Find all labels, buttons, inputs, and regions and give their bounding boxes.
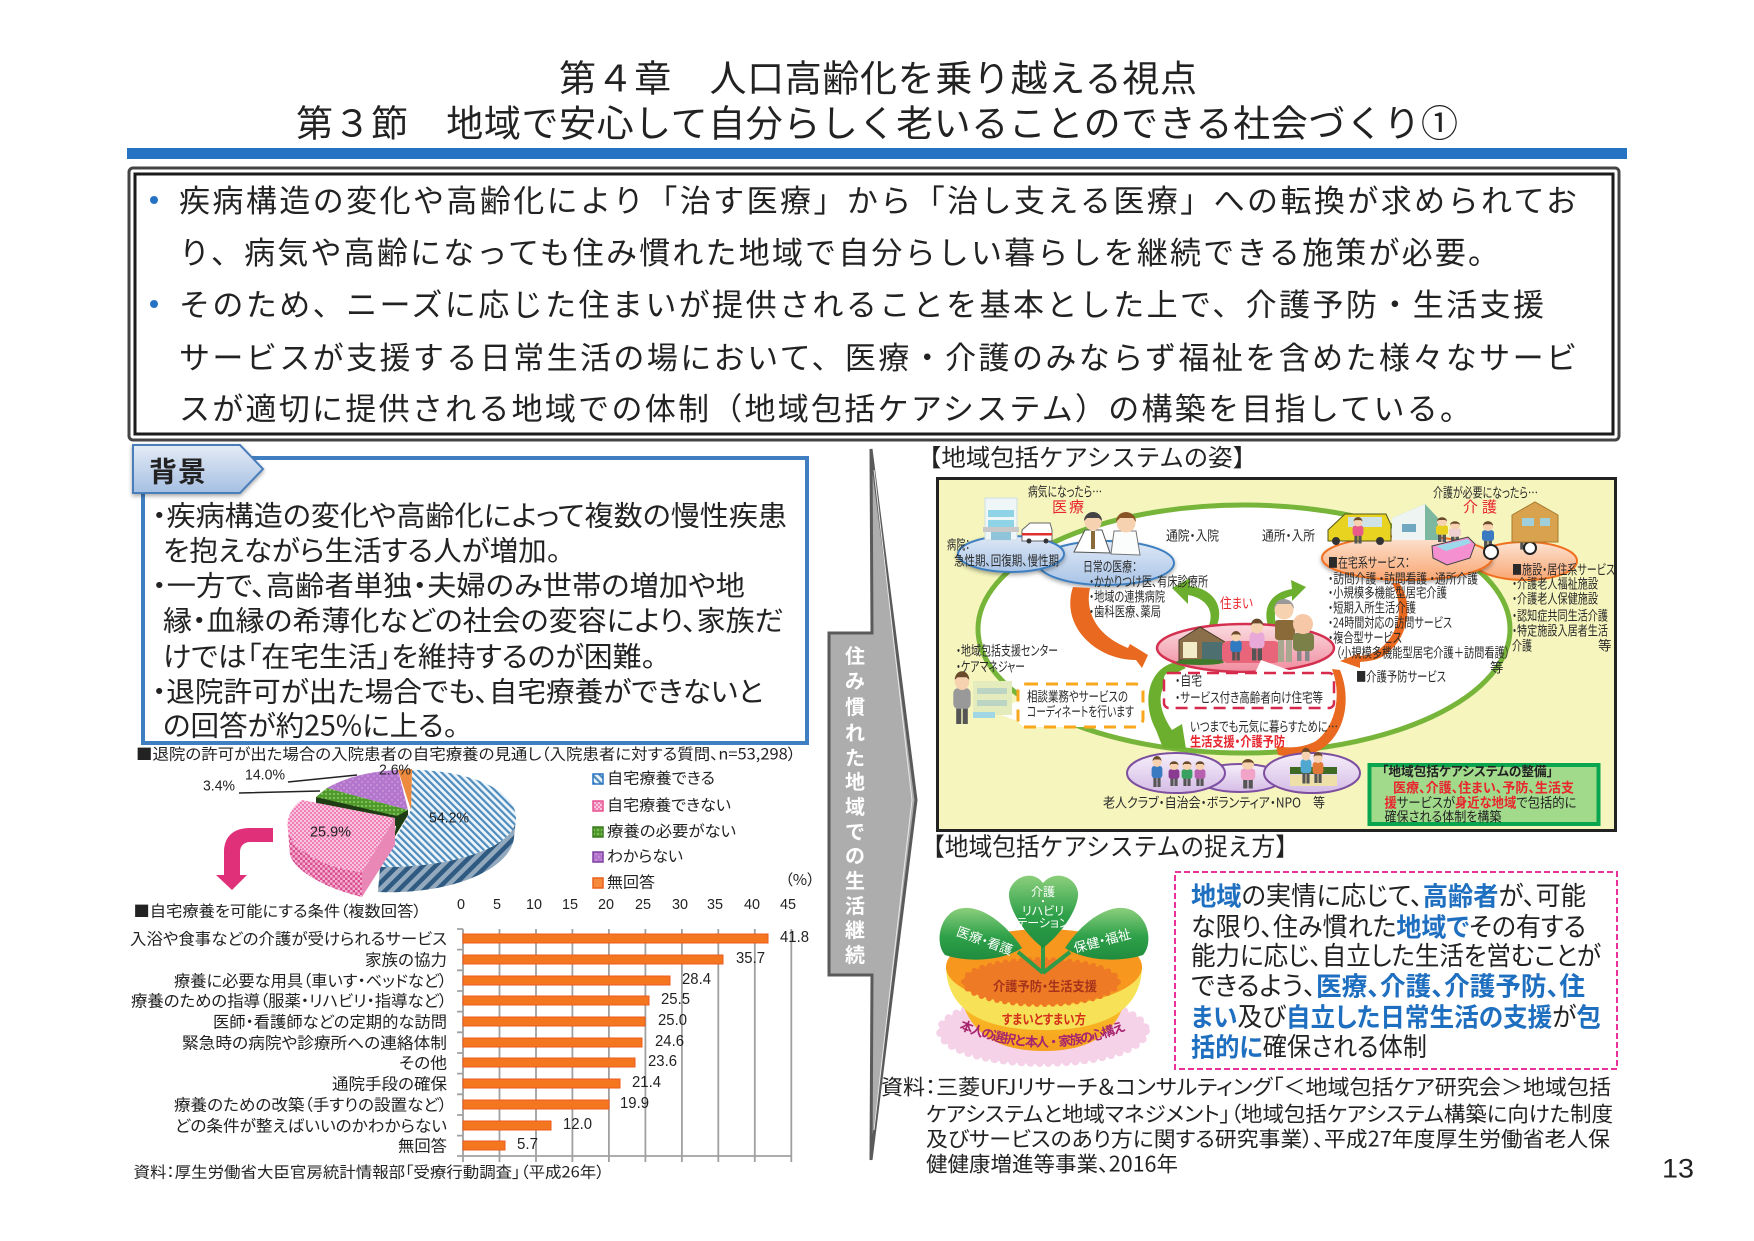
- bullet 2: [150, 300, 158, 308]
- diagram labels: facility: 等: [1598, 635, 1612, 655]
- callout: definition: [1175, 872, 1617, 1069]
- community ellipses: [1127, 753, 1360, 793]
- axis numbers: 15: [562, 896, 578, 913]
- axis numbers: 40: [744, 896, 760, 913]
- arrow label: み: [845, 665, 865, 694]
- orange soil: [946, 929, 1142, 1005]
- bar categories: 通院手段の確保: [332, 1071, 447, 1095]
- diagram labels: prevention: [1103, 716, 1338, 812]
- source: right: 及びサービスのあり方に関する研究事業）、平成27年度厚生労働省老人保: [926, 1124, 1610, 1154]
- diagram labels: support centre: ・地域包括支援センター: [956, 640, 1058, 660]
- bar values: 24.6: [655, 1033, 684, 1050]
- callout: definition: 括的に確保される体制: [1191, 1027, 1427, 1064]
- bar values: 28.4: [682, 971, 711, 988]
- arrow label: 生: [845, 865, 865, 894]
- diagram labels: care: ・短期入所生活介護: [1328, 597, 1416, 617]
- callout: system definition: 医療、介護、住まい、予防、生活支: [1393, 777, 1574, 797]
- diagram labels: care: ・訪問介護 ・訪問看護 ・通所介護: [1328, 568, 1478, 588]
- arrow label: [845, 640, 865, 968]
- diagram labels: care: ・小規模多機能型居宅介護: [1328, 582, 1447, 602]
- background text: 縁・血縁の希薄化などの社会の変容により、家族だ: [163, 600, 784, 640]
- bowl labels: [960, 976, 1126, 1048]
- icon: doctors: [1074, 512, 1140, 555]
- yellow rim: [946, 965, 1142, 1030]
- diagram labels: care: 介 護: [1463, 496, 1497, 517]
- arrow: home to community: [1148, 662, 1186, 749]
- axis numbers: 35: [707, 896, 723, 913]
- background text: けでは「在宅生活」を維持するのが困難。: [163, 636, 656, 676]
- bar categories: 療養に必要な用具（車いす・ベッドなど）: [174, 968, 447, 992]
- panel: summary box: 疾病構造の変化や高齢化により「治す医療」から「治し支える医療」への転換が求められてお: [179, 176, 1577, 221]
- bar chart heading: ■自宅療養を可能にする条件（複数回答）: [134, 900, 422, 922]
- arrow label: 住: [845, 640, 865, 669]
- page number: 13: [1662, 1154, 1694, 1184]
- source: right: ケアシステムと地域マネジメント」（地域包括ケアシステム構築に向けた制度: [926, 1099, 1613, 1129]
- title: [296, 49, 1458, 148]
- diagram labels: support centre: ・ケアマネジャー: [956, 656, 1025, 676]
- background text: [152, 495, 787, 745]
- bar values: 5.7: [517, 1136, 538, 1153]
- tag: 背景: 背景: [149, 451, 206, 491]
- bullet 1: [150, 196, 158, 204]
- callout: definition: な限り、住み慣れた地域でその有する: [1191, 907, 1586, 944]
- leaf: care: 介護: [1031, 883, 1055, 900]
- source: left: 資料：厚生労働省大臣官房統計情報部「受療行動調査」（平成26年）: [134, 1161, 604, 1183]
- bowl labels: 介護予防・生活支援: [993, 976, 1097, 995]
- arrow label: 地: [845, 766, 865, 795]
- source: right: [881, 1072, 1613, 1179]
- pie labels: [203, 763, 469, 841]
- background text: を抱えながら生活する人が増加。: [163, 530, 561, 570]
- diagram labels: prevention: 老人クラブ・自治会・ボランティア・NPO 等: [1103, 792, 1325, 812]
- callout: system definition: 「地域包括ケアシステムの整備」: [1382, 761, 1553, 780]
- bar categories: 家族の協力: [365, 947, 447, 971]
- plate: [939, 998, 1147, 1064]
- panel: care system diagram: [938, 478, 1616, 830]
- diagram labels: care: 介護が必要になったら…: [1433, 482, 1538, 502]
- diagram labels: support centre: [956, 640, 1134, 721]
- pie labels: 54.2%: [429, 811, 469, 827]
- panel: summary box: [129, 168, 1619, 440]
- diagram labels: medical: 医 療: [1052, 496, 1084, 517]
- arrow label: 慣: [845, 691, 865, 720]
- diagram labels: facility: ・認知症共同生活介護: [1512, 605, 1608, 625]
- icon: wheelchair users: [1482, 521, 1536, 559]
- slice: 25.9%: [288, 800, 395, 897]
- icon: bathing: [1432, 517, 1475, 565]
- arrow label: 活: [845, 890, 865, 919]
- bar values: 19.9: [620, 1095, 649, 1112]
- callout: coordinator: [993, 684, 1143, 727]
- bar categories: 入浴や食事などの介護が受けられるサービス: [130, 926, 447, 950]
- bar chart: [130, 896, 809, 1162]
- pie labels: 2.6%: [379, 763, 411, 779]
- pie chart heading: ■退院の許可が出た場合の入院患者の自宅療養の見通し（入院患者に対する質問、n=53,298）: [136, 743, 796, 765]
- slice: 3.4%: [316, 788, 408, 838]
- source: right: 資料：三菱UFJリサーチ＆コンサルティング「＜地域包括ケア研究会＞地域包括: [881, 1072, 1611, 1102]
- icon: care vehicle: [1328, 514, 1391, 545]
- diagram labels: care: 等: [1490, 657, 1504, 677]
- axis numbers: 20: [598, 896, 614, 913]
- diagram labels: housing: ・サービス付き高齢者向け住宅等: [1175, 687, 1323, 707]
- bar values: 12.0: [563, 1116, 592, 1133]
- diagram labels: housing: ・自宅: [1175, 670, 1202, 690]
- pie legend: 療養の必要がない: [607, 820, 736, 842]
- pie legend: 無回答: [607, 871, 656, 893]
- diagram labels: medical: [947, 481, 1315, 621]
- diagram labels: medical: 病気になったら…: [1028, 481, 1102, 501]
- diagram labels: medical: ・かかりつけ医、有床診療所: [1089, 571, 1208, 591]
- callout: definition: まい及び自立した日常生活の支援が包: [1191, 997, 1601, 1034]
- diagram labels: care: ■介護予防サービス: [1356, 666, 1446, 686]
- icon: house: [1176, 627, 1225, 665]
- callout: system definition: [1370, 761, 1598, 826]
- pie chart: [203, 763, 516, 897]
- diagram labels: medical: 通所・入所: [1262, 525, 1315, 545]
- pie labels: 14.0%: [245, 768, 285, 784]
- pie legend: [593, 767, 736, 893]
- title: 第４章 人口高齢化を乗り越える視点: [559, 49, 1197, 103]
- diagram labels: facility: ・介護老人福祉施設: [1512, 573, 1598, 593]
- slice: 2.6%: [398, 769, 412, 810]
- leaf: welfare: 保健・福祉: [1071, 923, 1133, 957]
- callout: housing: [1164, 660, 1334, 708]
- icon: family on sofa: [1222, 619, 1280, 663]
- medical ellipses: [958, 536, 1174, 585]
- diagram labels: prevention: いつまでも元気に暮らすために…: [1190, 716, 1338, 736]
- bar categories: どの条件が整えばいいのかわからない: [175, 1113, 447, 1137]
- bar categories: [130, 926, 447, 1157]
- bar values: 41.8: [780, 929, 809, 946]
- bar values: 23.6: [648, 1053, 677, 1070]
- diagram labels: prevention: 生活支援・介護予防: [1190, 731, 1285, 751]
- diagram labels: care: （小規模多機能型居宅介護＋訪問看護）: [1336, 642, 1510, 662]
- diagram labels: medical: 急性期、回復期、慢性期: [954, 550, 1059, 570]
- bar values: 35.7: [736, 950, 765, 967]
- leaf: care: リハビリ: [1022, 902, 1064, 919]
- tag: 背景: [133, 445, 263, 493]
- ring: [978, 505, 1510, 753]
- title: 第３節 地域で安心して自分らしく老いることのできる社会づくり①: [296, 94, 1458, 148]
- inner soil: [963, 960, 1119, 1004]
- diagram labels: medical: 通院・入院: [1166, 525, 1219, 545]
- diagram labels: medical: ・地域の連携病院: [1089, 586, 1165, 606]
- icon: elderly couple: [1274, 599, 1314, 662]
- diagram labels: housing: [1175, 594, 1323, 707]
- pie legend: わからない: [607, 845, 683, 867]
- background text: の回答が約25%に上る。: [163, 705, 458, 745]
- icon: walking pair: [1290, 748, 1337, 786]
- bar categories: 療養のための指導（服薬・リハビリ・指導など）: [131, 988, 447, 1012]
- icon: ambulance: [1022, 523, 1052, 544]
- axis numbers: 45: [780, 896, 796, 913]
- percent unit: （%）: [785, 869, 815, 890]
- bowl labels: すまいとすまい方: [1002, 1009, 1086, 1028]
- leaf: care: テーション: [1016, 914, 1070, 931]
- diagram labels: care: [1328, 482, 1538, 686]
- arrow label: 域: [845, 791, 865, 820]
- callout: system definition: 確保される体制を構築: [1384, 806, 1502, 826]
- arrow: home to care: [1266, 580, 1306, 626]
- heading: care system: 【地域包括ケアシステムの姿】: [917, 438, 1257, 473]
- diagram labels: medical: 病院：: [947, 534, 970, 554]
- axis numbers: 5: [493, 896, 501, 913]
- bar values: [517, 929, 809, 1153]
- bar values: 25.5: [661, 991, 690, 1008]
- diagram labels: support centre: 相談業務やサービスの: [1027, 686, 1128, 706]
- diagram labels: facility: 介護: [1512, 635, 1532, 655]
- panel: summary box: り、病気や高齢になっても住み慣れた地域で自分らしい暮らしを継続できる施策が必要。: [179, 228, 1499, 273]
- icon: care facility: [1392, 504, 1438, 540]
- background text: ・退院許可が出た場合でも、自宅療養ができないと: [152, 671, 763, 711]
- bar categories: 医師・看護師などの定期的な訪問: [213, 1009, 447, 1033]
- background text: ・疾病構造の変化や高齢化によって複数の慢性疾患: [152, 495, 787, 535]
- axis numbers: 30: [672, 896, 688, 913]
- pie legend: 自宅療養できる: [607, 767, 715, 789]
- arrow label: た: [845, 742, 865, 771]
- icon: elderly group: [1152, 756, 1205, 787]
- bar categories: 療養のための改築（手すりの設置など）: [174, 1092, 447, 1116]
- arrow: medical to home: [1070, 587, 1148, 668]
- arrow label: れ: [845, 717, 865, 746]
- bar values: 25.0: [658, 1012, 687, 1029]
- diagram labels: support centre: コーディネートを行います: [1027, 701, 1134, 721]
- illustration: plant and bowl: [936, 876, 1150, 1067]
- panel: summary box: スが適切に提供される地域での体制（地域包括ケアシステム）の構築を目指している。: [179, 384, 1471, 429]
- leaf: medical: [940, 908, 1022, 960]
- icon: hospital: [983, 498, 1019, 540]
- callout: definition: できるよう、医療、介護、介護予防、住: [1191, 966, 1585, 1003]
- pie labels: 25.9%: [310, 825, 351, 841]
- icon: support centre building: [973, 681, 1012, 718]
- diagram labels: medical: ・歯科医療、薬局: [1089, 601, 1161, 621]
- panel: summary box: そのため、ニーズに応じた住まいが提供されることを基本とした上で、介護予防・生活支援: [179, 280, 1544, 325]
- leaf: care: [1009, 876, 1078, 948]
- diagram labels: housing: 住まい: [1220, 594, 1253, 614]
- axis numbers: 25: [635, 896, 651, 913]
- pie labels: 3.4%: [203, 779, 235, 795]
- diagram labels: care: ・複合型サービス: [1328, 627, 1402, 647]
- leaf: welfare: [1065, 908, 1148, 960]
- bar categories: 無回答: [398, 1133, 447, 1157]
- diagram labels: facility: [1512, 559, 1615, 655]
- stems: [1018, 940, 1070, 973]
- slice: 14.0%: [327, 770, 408, 810]
- arrow label: の: [845, 840, 865, 869]
- icon: pink arrow: [216, 828, 273, 890]
- icon: care manager: [953, 671, 971, 724]
- care ellipses: [1322, 536, 1577, 580]
- background text: ・一方で、高齢者単独・夫婦のみ世帯の増加や地: [152, 565, 745, 605]
- arrow: community to home: [1276, 669, 1346, 756]
- slice: 54.2%: [378, 770, 516, 892]
- axis numbers: 10: [526, 896, 542, 913]
- diagram labels: care: ■在宅系サービス：: [1328, 552, 1410, 572]
- leaf: medical: 医療・看護: [954, 921, 1016, 959]
- pie legend: 自宅療養できない: [607, 794, 731, 816]
- source: right: 健健康増進等事業、2016年: [926, 1149, 1178, 1179]
- diagram labels: care: ・24時間対応の訪問サービス: [1328, 612, 1452, 632]
- bar categories: その他: [399, 1050, 447, 1074]
- arrow label: 続: [845, 939, 865, 968]
- callout: system definition: 援サービスが身近な地域で包括的に: [1384, 792, 1576, 812]
- diagram labels: facility: ・介護老人保健施設: [1512, 588, 1598, 608]
- title underline bar: [127, 148, 1627, 159]
- leaf: care: ・: [1038, 893, 1048, 908]
- bowl labels: 本人の選択と本人・家族の心構え: [960, 1020, 1126, 1048]
- panel: background: [133, 445, 807, 745]
- bowl: [957, 968, 1130, 1051]
- bar categories: 緊急時の病院や診療所への連絡体制: [182, 1030, 447, 1054]
- bars: [463, 934, 768, 1150]
- arrow: center grey: [829, 449, 916, 1160]
- diagram labels: facility: ・特定施設入居者生活: [1512, 620, 1608, 640]
- arrow label: で: [845, 816, 865, 845]
- callout: definition: 能力に応じ、自立した生活を営むことが: [1191, 936, 1601, 973]
- arrow: care to home: [1340, 583, 1407, 668]
- arrow label: 継: [845, 914, 865, 943]
- diagram labels: medical: 日常の医療：: [1083, 556, 1137, 576]
- bar values: 21.4: [632, 1074, 661, 1091]
- axis numbers: [457, 896, 796, 913]
- diagram labels: facility: ■施設・居住系サービス: [1512, 559, 1615, 579]
- heading: how to view: 【地域包括ケアシステムの捉え方】: [921, 828, 1299, 864]
- home ellipse: [1157, 624, 1334, 672]
- arrow: home to medical: [1172, 578, 1219, 628]
- icon: nursing house: [1512, 502, 1558, 542]
- panel: summary box: サービスが支援する日常生活の場において、医療・介護のみならず福祉を含めた様々なサービ: [179, 333, 1577, 378]
- axis numbers: 0: [457, 896, 465, 913]
- icon: exercising elder: [1241, 759, 1255, 788]
- callout: definition: 地域の実情に応じて、高齢者が、可能: [1191, 876, 1586, 913]
